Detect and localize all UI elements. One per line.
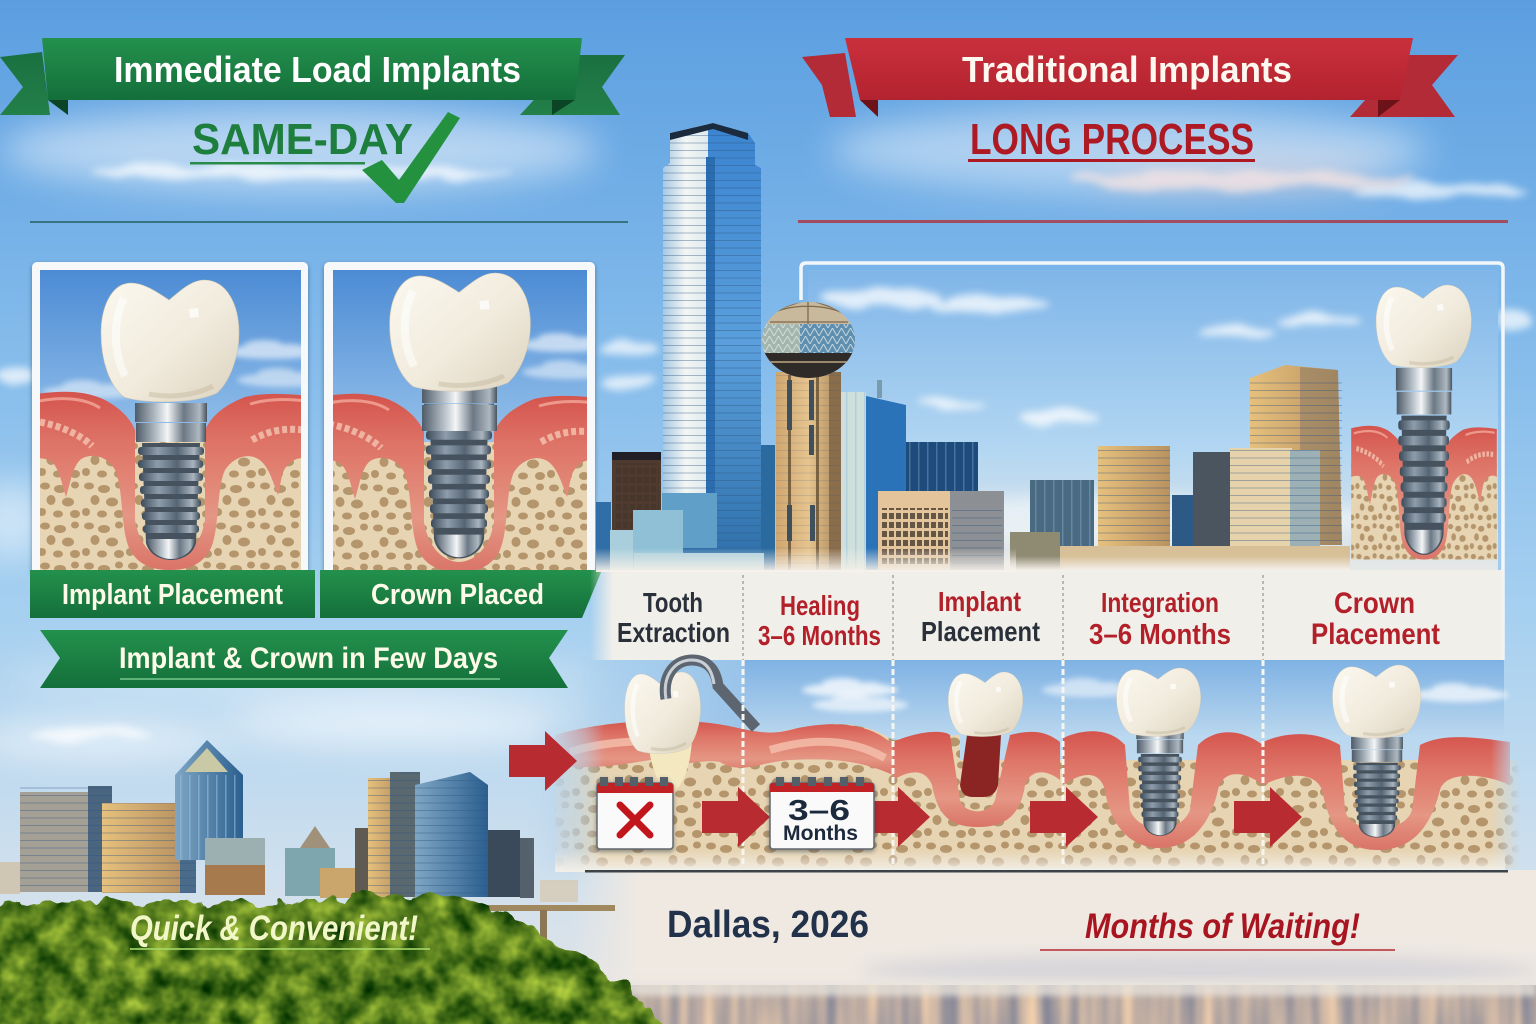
arrow 4 (1030, 787, 1098, 847)
step heading: integration (1089, 587, 1231, 651)
step 4: implant integrating (1117, 668, 1201, 836)
bottom left skyline (0, 740, 615, 942)
calendar with 3-6 months: Months (783, 822, 858, 845)
crown (101, 280, 239, 402)
dotted step separators (743, 575, 1263, 866)
arrow 1 (509, 731, 577, 791)
dark blue strip behind (760, 445, 775, 570)
step heading: implant placement: Placement (921, 616, 1040, 647)
calendar with 3-6 months: 3–6 (788, 795, 850, 827)
heading: Immediate Load Implants (114, 49, 521, 90)
subheading: LONG PROCESS: LONG PROCESS (970, 115, 1254, 164)
label: implant placement: Implant Placement (62, 579, 283, 611)
trees foreground (0, 892, 680, 1024)
step heading: implant placement: Implant (938, 586, 1021, 617)
skyline inside panel (1000, 365, 1350, 570)
arrow 2 (702, 787, 770, 847)
step heading: crown placement: Crown (1334, 587, 1415, 620)
dark glass building (906, 442, 978, 512)
step heading: tooth extraction: Extraction (617, 617, 730, 648)
calendar with X (597, 777, 673, 849)
arrow 3 (862, 787, 930, 847)
step heading: integration: 3–6 Months (1089, 619, 1231, 651)
steps text strip background (590, 570, 1504, 660)
step heading: tooth extraction: Tooth (643, 587, 703, 618)
blue glass building (841, 380, 906, 570)
step heading: healing: Healing (780, 590, 860, 621)
header right: red ribbon (802, 38, 1458, 117)
subheading: SAME-DAY with check mark (190, 112, 460, 203)
step 1: extracted tooth and forceps (625, 660, 756, 795)
label: crown placed (320, 570, 602, 618)
low glass buildings (596, 502, 634, 570)
tagline: months of waiting: Months of Waiting! (1085, 907, 1360, 946)
divider right (798, 220, 1508, 223)
fade at skyline base (596, 548, 1016, 572)
label: crown placed: Crown Placed (371, 579, 544, 611)
tan office building (878, 491, 1004, 570)
process row: gum and bone cross-section (543, 660, 1520, 872)
ribbon: implant and crown in few days: Implant & Crown in Few Days (119, 642, 498, 675)
header left: green ribbon (0, 38, 625, 115)
step heading: crown placement (1311, 587, 1440, 651)
implant (135, 403, 207, 560)
location and date: Dallas, 2026 (667, 904, 869, 946)
divider left (30, 221, 628, 223)
brown building (612, 452, 661, 532)
implant (424, 404, 494, 558)
calendar with 3-6 months (770, 777, 874, 849)
step heading: implant placement (921, 586, 1040, 647)
tagline: quick and convenient: Quick & Convenient! (130, 909, 418, 948)
step heading: healing (758, 590, 881, 651)
bottom pale ground band and water (570, 870, 1536, 1024)
Bank of America tower (633, 120, 764, 570)
ribbon: implant and crown in few days (40, 630, 568, 688)
central Dallas skyline (596, 120, 1016, 572)
step heading: integration: Integration (1101, 587, 1219, 618)
step 5: final crown (1332, 665, 1421, 837)
Reunion Tower (760, 300, 858, 570)
crown (390, 273, 530, 391)
panel: crown placed (319, 262, 618, 574)
panel: implant placement (30, 262, 333, 574)
arrow 5 (1234, 787, 1302, 847)
heading: Traditional Implants (962, 49, 1292, 90)
baseline rule (585, 870, 1508, 872)
step heading: crown placement: Placement (1311, 618, 1440, 651)
step heading: healing: 3–6 Months (758, 620, 881, 651)
step heading: tooth extraction (617, 587, 730, 648)
tall implant at right of panel (1351, 285, 1497, 560)
panel: traditional process large frame (800, 262, 1504, 660)
step 3: socket with post and crown (948, 672, 1023, 797)
label: implant placement (30, 570, 315, 618)
subheading: SAME-DAY with check mark: SAME-DAY (192, 115, 413, 164)
